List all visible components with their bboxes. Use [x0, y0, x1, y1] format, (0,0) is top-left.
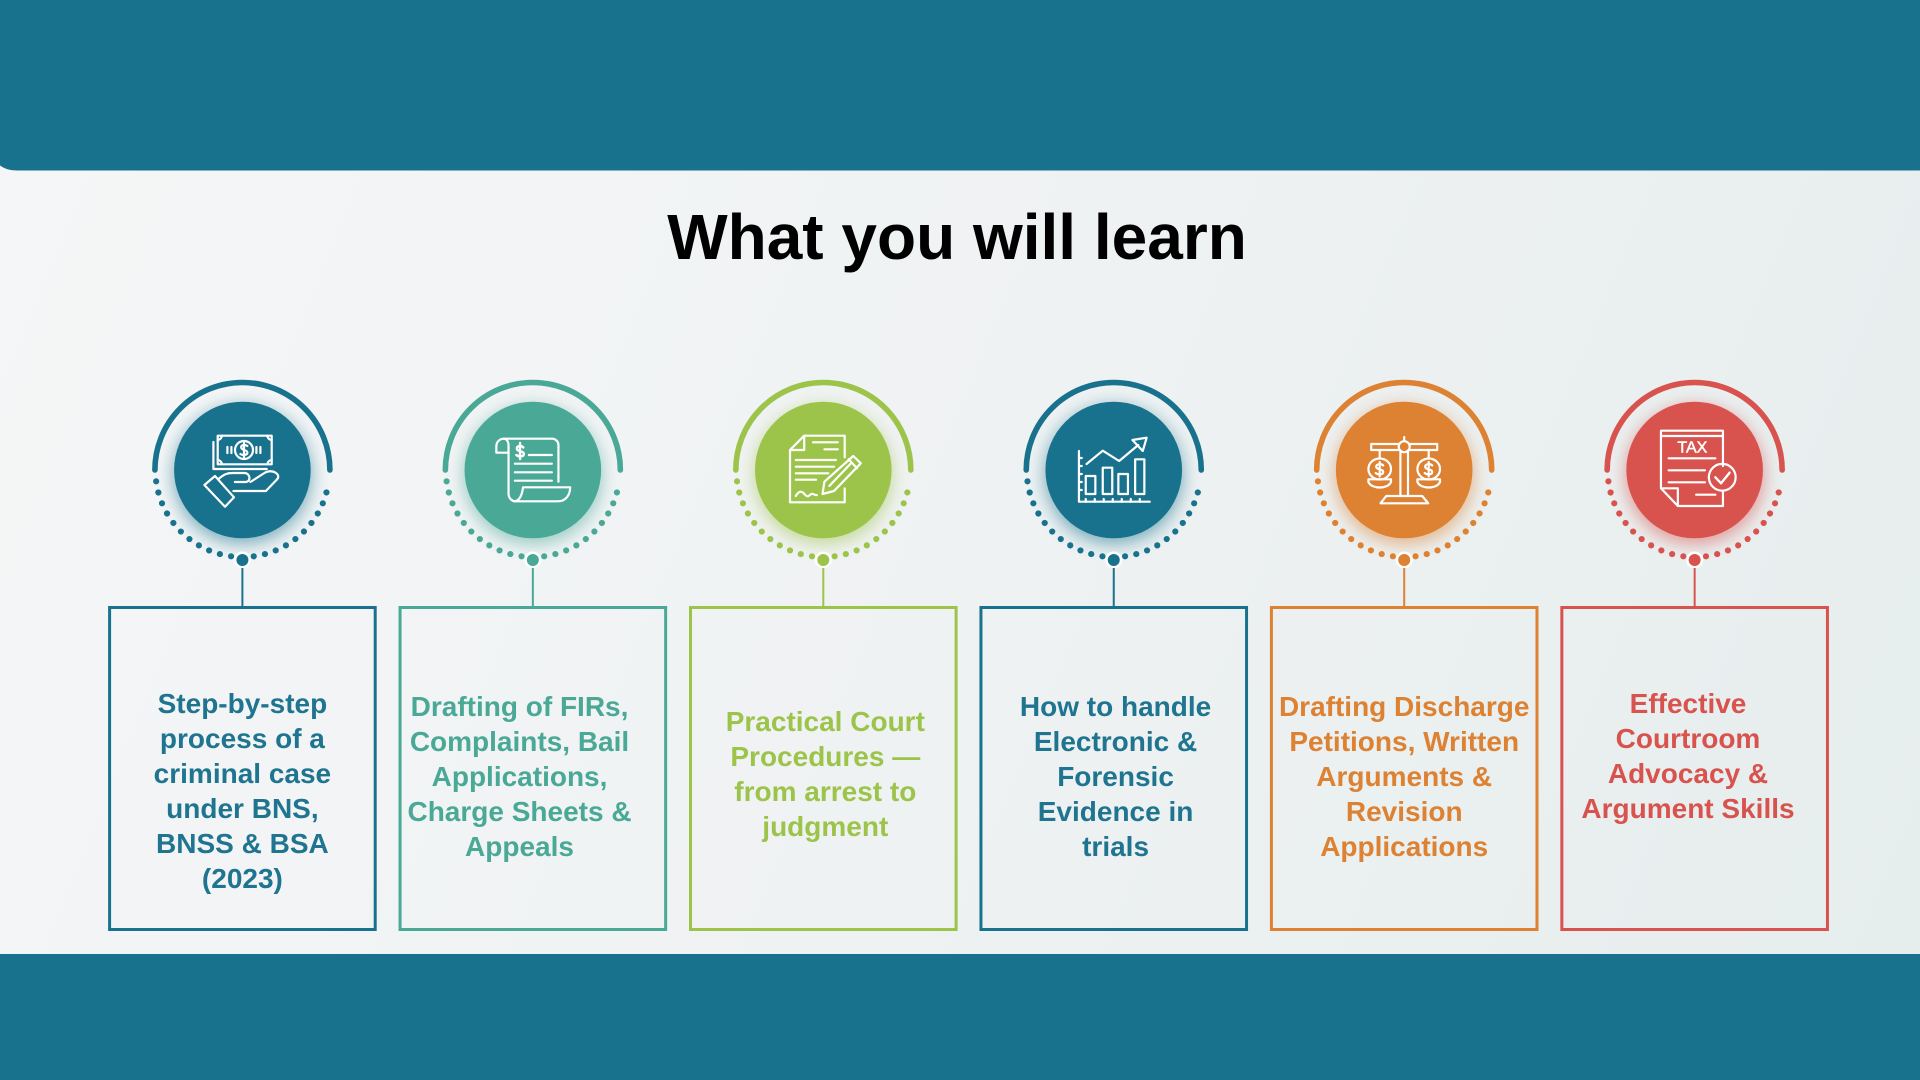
- text: step-by-step: Step-by-step: [158, 688, 327, 719]
- text: electronic evidence: Forensic: [1057, 761, 1174, 792]
- text: step-by-step: process of a: [160, 723, 325, 754]
- panel: step-by-step process: [110, 382, 375, 930]
- text: practical court: from arrest to: [734, 776, 916, 807]
- panel: drafting discharge petitions: [1271, 382, 1537, 930]
- text: electronic evidence: trials: [1082, 831, 1149, 862]
- icon: balance scale: [1368, 437, 1440, 503]
- panel: drafting of FIRs: [400, 382, 666, 930]
- text: practical court: judgment: [761, 811, 888, 842]
- text: drafting discharge: Drafting Discharge: [1279, 691, 1529, 722]
- text: step-by-step: criminal case: [154, 758, 331, 789]
- text: step-by-step: BNSS & BSA: [156, 828, 329, 859]
- title: What you will learn: [667, 201, 1247, 273]
- icon: tax form with check: [1661, 431, 1736, 506]
- panel: courtroom advocacy: [1562, 382, 1827, 930]
- text: courtroom advocacy: Courtroom: [1616, 723, 1760, 754]
- text: practical court: Procedures —: [730, 741, 920, 772]
- text: courtroom advocacy: Argument Skills: [1581, 793, 1795, 824]
- icon: document and pencil: [790, 436, 861, 502]
- text: drafting discharge: Applications: [1320, 831, 1488, 862]
- panel: practical court procedures: [690, 382, 956, 930]
- top band: [0, 0, 1920, 170]
- text: drafting discharge: Arguments &: [1316, 761, 1492, 792]
- text: drafting discharge: Petitions, Written: [1289, 726, 1519, 757]
- panel: electronic evidence: [981, 382, 1247, 930]
- bottom band: [0, 954, 1920, 1080]
- text: drafting of FIRs: Applications,: [432, 761, 607, 792]
- text: courtroom advocacy: Advocacy &: [1608, 758, 1768, 789]
- text: step-by-step: under BNS,: [166, 793, 319, 824]
- text: drafting of FIRs: Charge Sheets &: [407, 796, 632, 827]
- icon: bar chart with arrow: [1079, 438, 1150, 502]
- text: practical court: Practical Court: [726, 706, 925, 737]
- text: drafting of FIRs: Appeals: [465, 831, 574, 862]
- text: electronic evidence: Evidence in: [1038, 796, 1193, 827]
- text: courtroom advocacy: Effective: [1630, 688, 1746, 719]
- text: drafting of FIRs: Complaints, Bail: [410, 726, 629, 757]
- text: drafting of FIRs: Drafting of FIRs,: [411, 691, 628, 722]
- icon: cash in hand: [204, 436, 278, 507]
- text: drafting discharge: Revision: [1346, 796, 1463, 827]
- text: step-by-step: (2023): [202, 863, 283, 894]
- icon: scroll receipt: [496, 439, 570, 501]
- icon: tax form with check: TAX: [1677, 440, 1708, 457]
- text: electronic evidence: How to handle: [1020, 691, 1211, 722]
- text: electronic evidence: Electronic &: [1034, 726, 1197, 757]
